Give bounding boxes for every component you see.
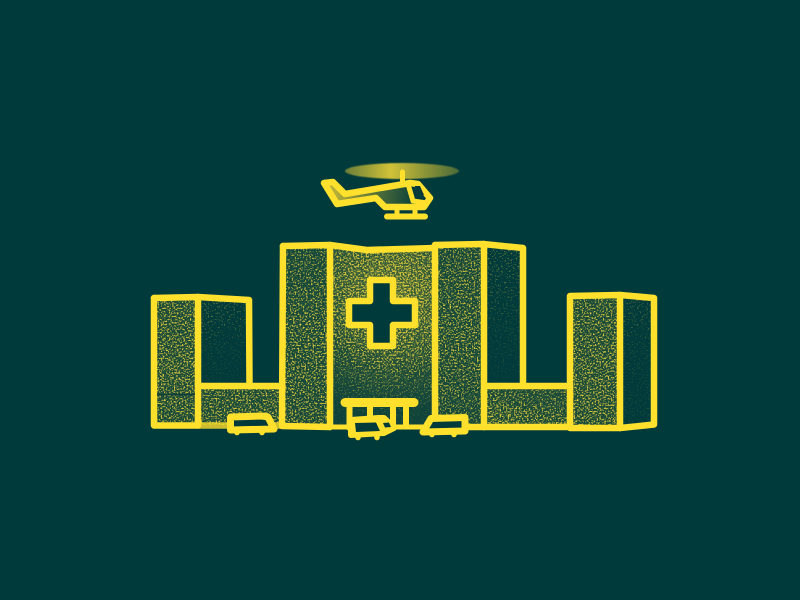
icon: helicopter: [324, 172, 430, 216]
icon: centre ambulance: [351, 418, 394, 440]
panel: main hospital block: [282, 244, 523, 427]
panel: left building: [154, 297, 283, 426]
helicopter rotor blur: [345, 163, 459, 179]
helicopter body shading: [326, 184, 428, 207]
icon: right ambulance: [423, 418, 465, 437]
entrance canopy: [345, 402, 414, 428]
icon: medical cross: [349, 280, 415, 346]
panel: right wing and building: [484, 295, 654, 428]
icon: left ambulance: [230, 413, 274, 435]
soft tint beneath the grain: [155, 246, 619, 427]
grain shading of the building panels: [155, 246, 653, 427]
